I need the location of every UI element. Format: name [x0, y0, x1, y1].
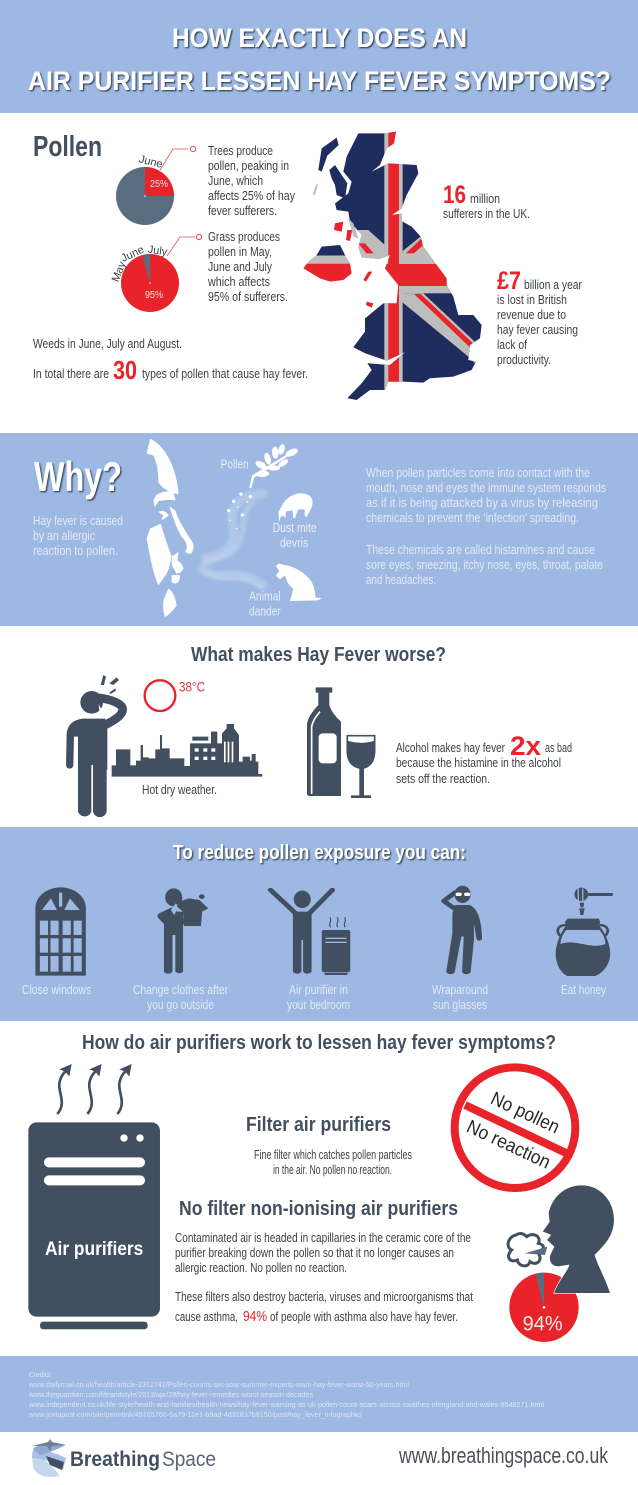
background: credits band [0, 1356, 638, 1432]
map: islands [313, 138, 373, 308]
text: why explanation: chemicals to prevent the ‘infection’ spreading. [366, 511, 579, 525]
text: why intro: Hay fever is caused [33, 514, 123, 528]
map: UK union flag [300, 115, 497, 415]
text: credits: www.theguardian.com/lifeandstyle/2013/apr/28/hay-fever-remedies-worst-season-decades [28, 1390, 313, 1399]
icon: cat [276, 564, 322, 601]
text: alcohol: 2x [510, 731, 541, 761]
text: no filter explanation: allergic reaction. No pollen no reaction. [175, 1261, 347, 1275]
text: grass: June and July [208, 260, 273, 274]
stat: 16 million: 16 [443, 181, 466, 209]
stat: 7 billion [497, 267, 582, 367]
text: no filter explanation: These filters also destroy bacteria, viruses and microorganisms that [175, 1290, 473, 1304]
stat: 7 billion: productivity. [497, 353, 551, 367]
icon: sun [145, 680, 175, 711]
pie chart: grass 95%: June [119, 244, 146, 265]
text: 30 types of pollen [33, 355, 308, 385]
text: alcohol: sets off the reaction. [396, 772, 490, 786]
stat: 7 billion: hay fever causing [497, 323, 578, 337]
text: air purifiers label: Air purifiers [45, 1239, 143, 1260]
text: hot dry weather: Hot dry weather. [142, 783, 217, 797]
background: title band [0, 0, 638, 113]
text: credits: www.independent.co.uk/life-style/health-and-families/health-news/hay-fever-warning-as-uk-pollen-count-soars-across-swathes-ofengland-and-wales-9548271.html [28, 1400, 544, 1409]
heading: to reduce pollen exposure: To reduce pollen exposure you can: [173, 842, 466, 864]
icon: person changing clothes [161, 888, 208, 974]
stat: 7 billion: revenue due to [497, 308, 566, 322]
text: trees [208, 144, 296, 218]
pie chart: grass 95%: May [110, 260, 129, 284]
illustration: no pollen sign, head, pie [455, 1067, 614, 1342]
icon: airflow arrows [57, 1064, 132, 1114]
text: credits: www.juxtapost.com/site/permlink/45165760-6a79-11e1-b9ad-4d31837b9150/post/hay_fever_infographic/ [28, 1410, 363, 1419]
icon: face profile [147, 439, 193, 617]
text: 30 types of pollen: 30 [113, 355, 137, 385]
logo: Breathing Space [32, 1439, 216, 1477]
text: no filter explanation [175, 1231, 473, 1325]
text: no filter explanation: Contaminated air is headed in capillaries in the ceramic core of the [175, 1231, 471, 1245]
icon: person with headache [66, 675, 123, 817]
illustration: allergen wisp [202, 494, 263, 589]
text: no filter explanation: of people with asthma also have hay fever. [270, 1310, 458, 1324]
stat: 16 million: million [470, 192, 500, 206]
text: credits [28, 1370, 544, 1419]
pie chart: grass 95% [110, 234, 202, 312]
icon: prohibition sign: No reaction [463, 1116, 554, 1174]
text: grass: 95% of sufferers. [208, 290, 288, 304]
text: why explanation: When pollen particles come into contact with the [366, 466, 590, 480]
title: HOW EXACTLY DOES AN [172, 23, 467, 53]
text: alcohol: because the histamine in the alcohol [396, 756, 561, 770]
text: alcohol: as bad [545, 741, 572, 755]
text: no filter explanation: purifier breaking down the pollen so that it no longer causes an [175, 1246, 454, 1260]
icon: sneezing head [542, 1185, 614, 1293]
text: allergen labels: Pollen [221, 457, 249, 472]
text: allergen labels: dander [249, 603, 281, 618]
heading: what makes hay fever worse: What makes Hay Fever worse? [191, 644, 446, 666]
text: why explanation: as if it is being attacked by a virus by releasing [366, 496, 598, 510]
text: why explanation [366, 466, 606, 587]
text: 30 types of pollen: types of pollen that cause hay fever. [142, 367, 308, 381]
icon: city skyline [112, 724, 262, 777]
text: reduce exposure labels [22, 983, 607, 1012]
text: reduce exposure labels: your bedroom [287, 998, 350, 1012]
text: reduce exposure labels: Change clothes after [133, 983, 228, 997]
icon: wine bottle and glass [307, 687, 375, 798]
icon: prohibition sign [455, 1067, 575, 1188]
pie chart: grass 95%: July [147, 244, 168, 258]
text: no filter explanation: 94% [243, 1308, 267, 1325]
text: 30 types of pollen: In total there are [33, 367, 109, 381]
text: filter explanation: Fine filter which catches pollen particles [254, 1148, 412, 1162]
heading: no filter non-ionising air purifiers: No filter non-ionising air purifiers [179, 1198, 458, 1220]
map: Northern Ireland [304, 245, 352, 282]
stat: 7 billion: £7 [497, 267, 521, 295]
illustration: hot weather [66, 675, 375, 817]
text: filter explanation: in the air. No pollen no reaction. [273, 1163, 392, 1177]
text: why explanation: and headaches. [366, 573, 436, 587]
text: why intro [33, 514, 123, 558]
text: grass: which affects [207, 275, 270, 289]
stat: 7 billion: is lost in British [497, 293, 567, 307]
heading: Pollen: Pollen [33, 131, 102, 163]
text: reduce exposure labels: you go outside [147, 998, 214, 1012]
icon: sneeze cloud [508, 1234, 543, 1266]
text: reduce exposure labels: Eat honey [561, 983, 607, 997]
text: trees: fever sufferers. [208, 204, 277, 218]
text: trees: June, which [208, 174, 263, 188]
icon: honey pot and dipper [556, 888, 613, 976]
text: reduce exposure labels: Air purifier in [289, 983, 348, 997]
text: why intro: by an allergic [33, 529, 95, 543]
stat: 16 million: sufferers in the UK. [443, 207, 530, 221]
heading: how do air purifiers work: How do air purifiers work to lessen hay fever symptoms? [82, 1032, 556, 1054]
pie chart: trees 25%: June [138, 153, 164, 171]
text: filter explanation [254, 1148, 412, 1177]
text: trees: Trees produce [208, 144, 273, 158]
title [28, 23, 611, 96]
text: alcohol: Alcohol makes hay fever [396, 741, 505, 755]
pie chart: grass 95%: 95% [145, 290, 163, 301]
icon: window [35, 887, 86, 976]
text: reduce exposure labels: Close windows [22, 983, 91, 997]
pie chart: trees 25%: 25% [150, 179, 168, 190]
pie chart: 94% [509, 1273, 579, 1342]
text: no filter explanation: cause asthma, [175, 1310, 238, 1324]
pie chart: trees 25% [116, 146, 196, 225]
stat: 7 billion: lack of [497, 338, 527, 352]
pie chart: 94%: 94% [523, 1313, 563, 1336]
text: reduce exposure labels: Wraparound [432, 983, 488, 997]
text: grass [207, 230, 288, 304]
heading: Why?: Why? [34, 453, 122, 500]
illustration: pollen dots [227, 492, 252, 529]
logo: Breathing Space: Space [162, 1448, 216, 1471]
background: why band [0, 433, 638, 626]
text: trees: affects 25% of hay [208, 189, 296, 203]
stat: 16 million [443, 181, 530, 221]
text: why explanation: These chemicals are called histamines and cause [366, 543, 595, 557]
text: allergen labels [221, 457, 317, 618]
text: grass: pollen in May, [208, 245, 272, 259]
icon: person with sun glasses [444, 886, 482, 974]
text: allergen labels: Animal [249, 588, 281, 603]
icon: pollen branch [249, 443, 299, 488]
icon: purifier body [28, 1122, 160, 1317]
illustration: air purifier [28, 1064, 160, 1329]
stat: 7 billion: billion a year [524, 278, 582, 292]
text: reduce exposure labels: sun glasses [433, 998, 487, 1012]
heading: filter air purifiers: Filter air purifiers [246, 1114, 391, 1136]
text: allergen labels: Dust mite [273, 520, 317, 535]
text: trees: pollen, peaking in [208, 159, 289, 173]
text: credits: www.dailymail.co.uk/health/article-2312742/Pollen-counts-set-soar-summer-experts-warn-hay-fever-worst-50-years.html [28, 1380, 409, 1389]
background: reduce exposure band [0, 827, 638, 1021]
illustration: face, allergens [147, 439, 322, 618]
icon: prohibition sign: No pollen [487, 1088, 563, 1138]
text: temperature: 38°C [179, 678, 205, 694]
text: allergen labels: devris [280, 535, 309, 550]
logo: Breathing Space: Breathing [70, 1448, 160, 1471]
text: alcohol [396, 731, 572, 786]
text: grass: Grass produces [208, 230, 280, 244]
icon: person with raised arms and purifier [271, 890, 350, 975]
text: credits: Credits: [29, 1370, 52, 1379]
text: weeds: Weeds in June, July and August. [33, 337, 182, 351]
icons: reduce exposure row [35, 886, 613, 976]
icon: dust mite [278, 493, 313, 522]
text: why intro: reaction to pollen. [33, 544, 118, 558]
